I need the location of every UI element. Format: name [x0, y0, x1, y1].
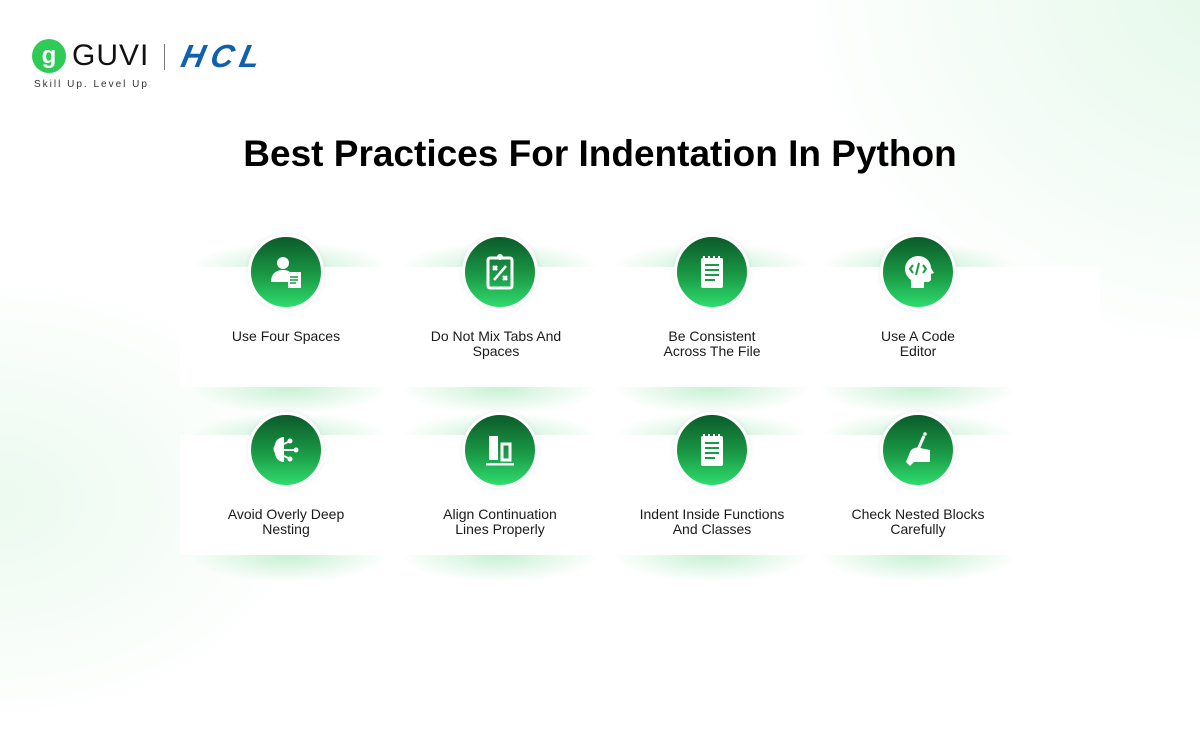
card: Use A Code Editor: Use A Code [881, 328, 955, 344]
card: Indent Inside Functions: Indent Inside Functions [640, 506, 784, 522]
logo [32, 38, 270, 90]
card: Avoid Deep Nesting [228, 412, 344, 537]
card: Indent Inside Functions [640, 412, 784, 537]
icon: notepad [674, 234, 750, 310]
logo: Skill Up. Level Up [34, 79, 149, 90]
icon: notepad [674, 412, 750, 488]
icon: hand writing [880, 412, 956, 488]
card: Avoid Deep Nesting: Nesting [262, 521, 310, 537]
logo: GUVI [72, 39, 149, 72]
card: Do Not Mix Tabs [431, 234, 561, 359]
card: Use Four Spaces [232, 234, 340, 344]
icon: guvi logo [32, 39, 66, 73]
icon: head code [880, 234, 956, 310]
card: Be Consistent [664, 234, 760, 359]
card: Avoid Deep Nesting: Avoid Overly Deep [228, 506, 344, 522]
card: Align Continuation [443, 412, 557, 537]
title: Best Practices For Indentation In Python [243, 133, 957, 174]
card: Be Consistent: Be Consistent [668, 328, 756, 344]
card: Use Four Spaces: Use Four Spaces [232, 328, 340, 344]
icon: brain network [248, 412, 324, 488]
icon: person document [248, 234, 324, 310]
logo: HCL [178, 38, 270, 74]
card: Use A Code Editor [880, 234, 956, 359]
card: Check Nested Blocks [851, 412, 985, 537]
icon: align bars [462, 412, 538, 488]
card: Check Nested Blocks: Check Nested Blocks [851, 506, 985, 522]
card: Use A Code Editor: Editor [900, 343, 936, 359]
card: Do Not Mix Tabs: Spaces [473, 343, 519, 359]
card: Align Continuation: Align Continuation [443, 506, 557, 522]
card: Do Not Mix Tabs: Do Not Mix Tabs And [431, 328, 561, 344]
card: Check Nested Blocks: Carefully [890, 521, 946, 537]
icon: guvi logo: g [42, 42, 56, 69]
card: Indent Inside Functions: And Classes [673, 521, 751, 537]
card: Align Continuation: Lines Properly [455, 521, 545, 537]
card: Be Consistent: Across The File [664, 343, 760, 359]
icon: clipboard [462, 234, 538, 310]
